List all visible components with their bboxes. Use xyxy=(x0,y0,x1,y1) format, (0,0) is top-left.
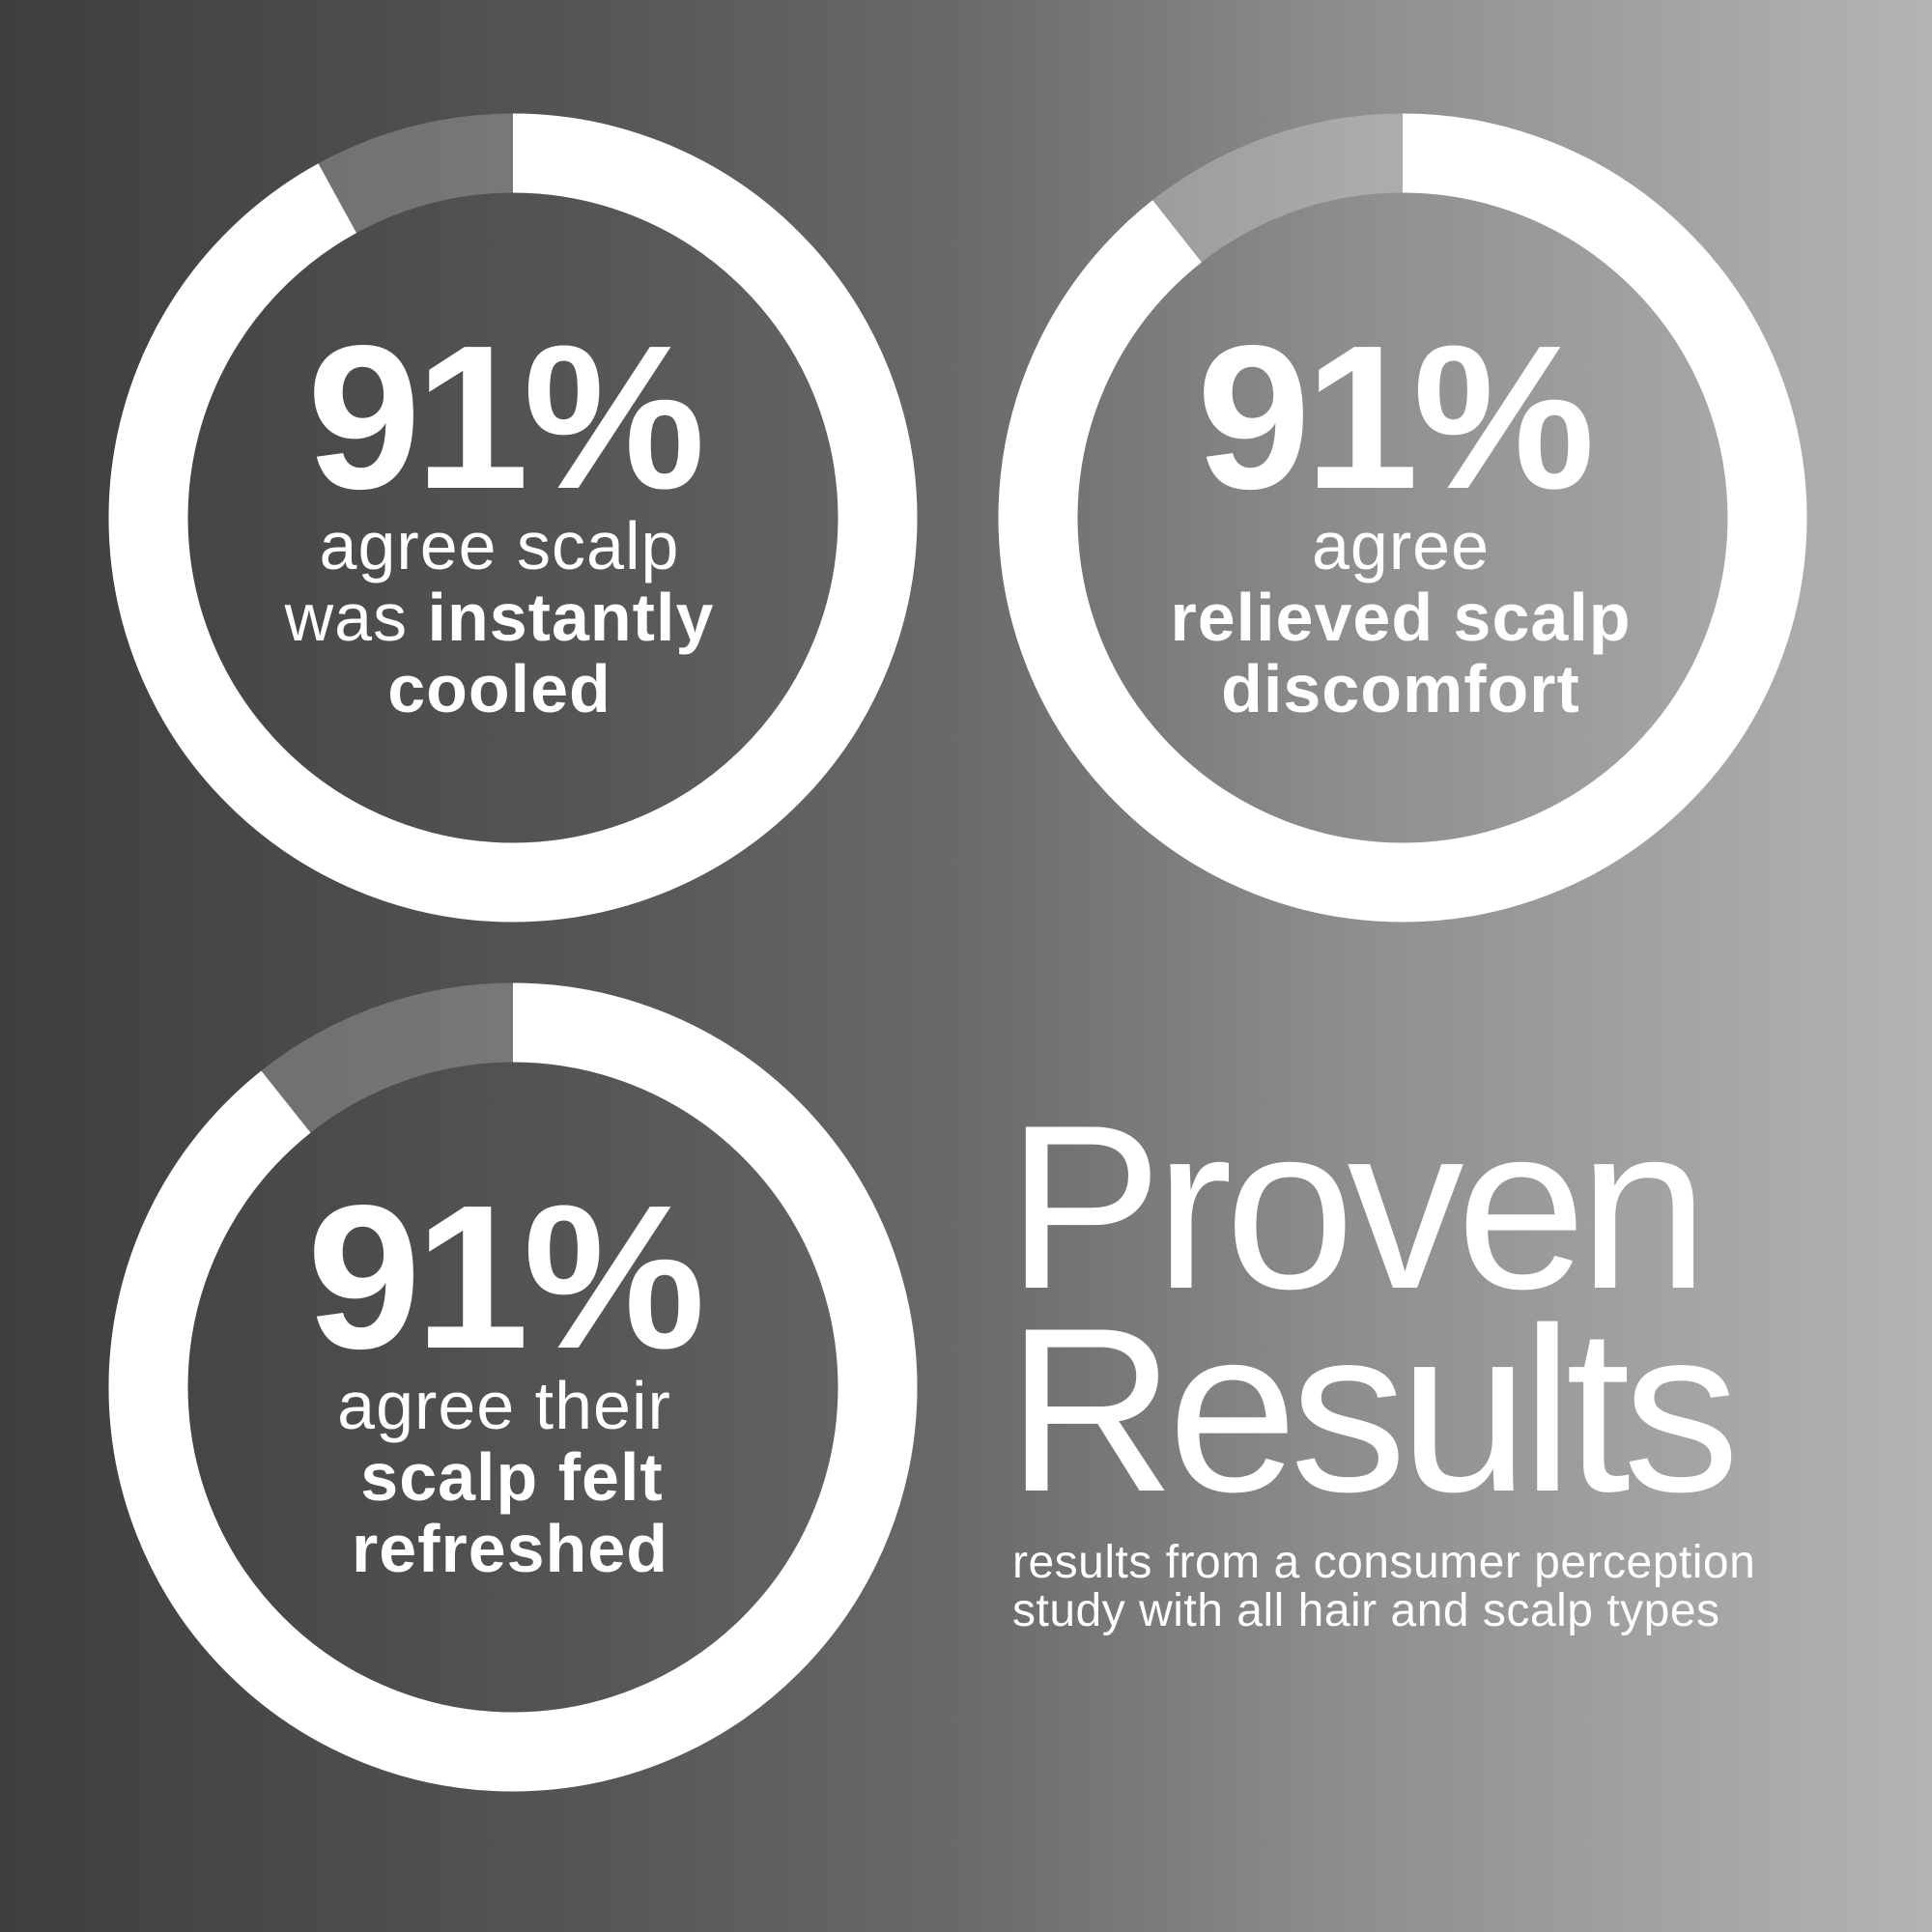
stat text 2: relieved scalp xyxy=(1170,580,1632,655)
stat text 1 xyxy=(284,302,714,726)
title: Proven Results: Results xyxy=(1007,1280,1732,1541)
stat text 3: refreshed xyxy=(352,1511,668,1586)
panel: donut 1 instantly cooled xyxy=(149,153,877,883)
stat text 1: cooled xyxy=(387,651,611,726)
title: Proven Results: Proven xyxy=(1007,1077,1701,1338)
stat text 1: agree scalp xyxy=(320,508,679,583)
stat text 2 xyxy=(1170,302,1632,726)
stat text 1: 91% xyxy=(307,302,700,531)
subtitle text xyxy=(1012,1537,1755,1636)
panel: donut 2 relieved discomfort xyxy=(1037,153,1768,883)
stat text 2: discomfort xyxy=(1221,651,1580,726)
stat text 3: agree their xyxy=(337,1368,671,1443)
stat text 1: was instantly xyxy=(284,580,714,655)
title: Proven Results xyxy=(1007,1077,1732,1541)
stat text 3: scalp felt xyxy=(360,1439,664,1515)
stat text 2: 91% xyxy=(1197,302,1590,531)
stat text 2: agree xyxy=(1312,508,1490,583)
stat text 3 xyxy=(307,1162,700,1586)
panel: donut 3 felt refreshed xyxy=(149,1022,877,1752)
stat text 3: 91% xyxy=(307,1162,700,1391)
subtitle text: study with all hair and scalp types xyxy=(1012,1585,1720,1636)
subtitle text: results from a consumer perception xyxy=(1012,1537,1755,1588)
